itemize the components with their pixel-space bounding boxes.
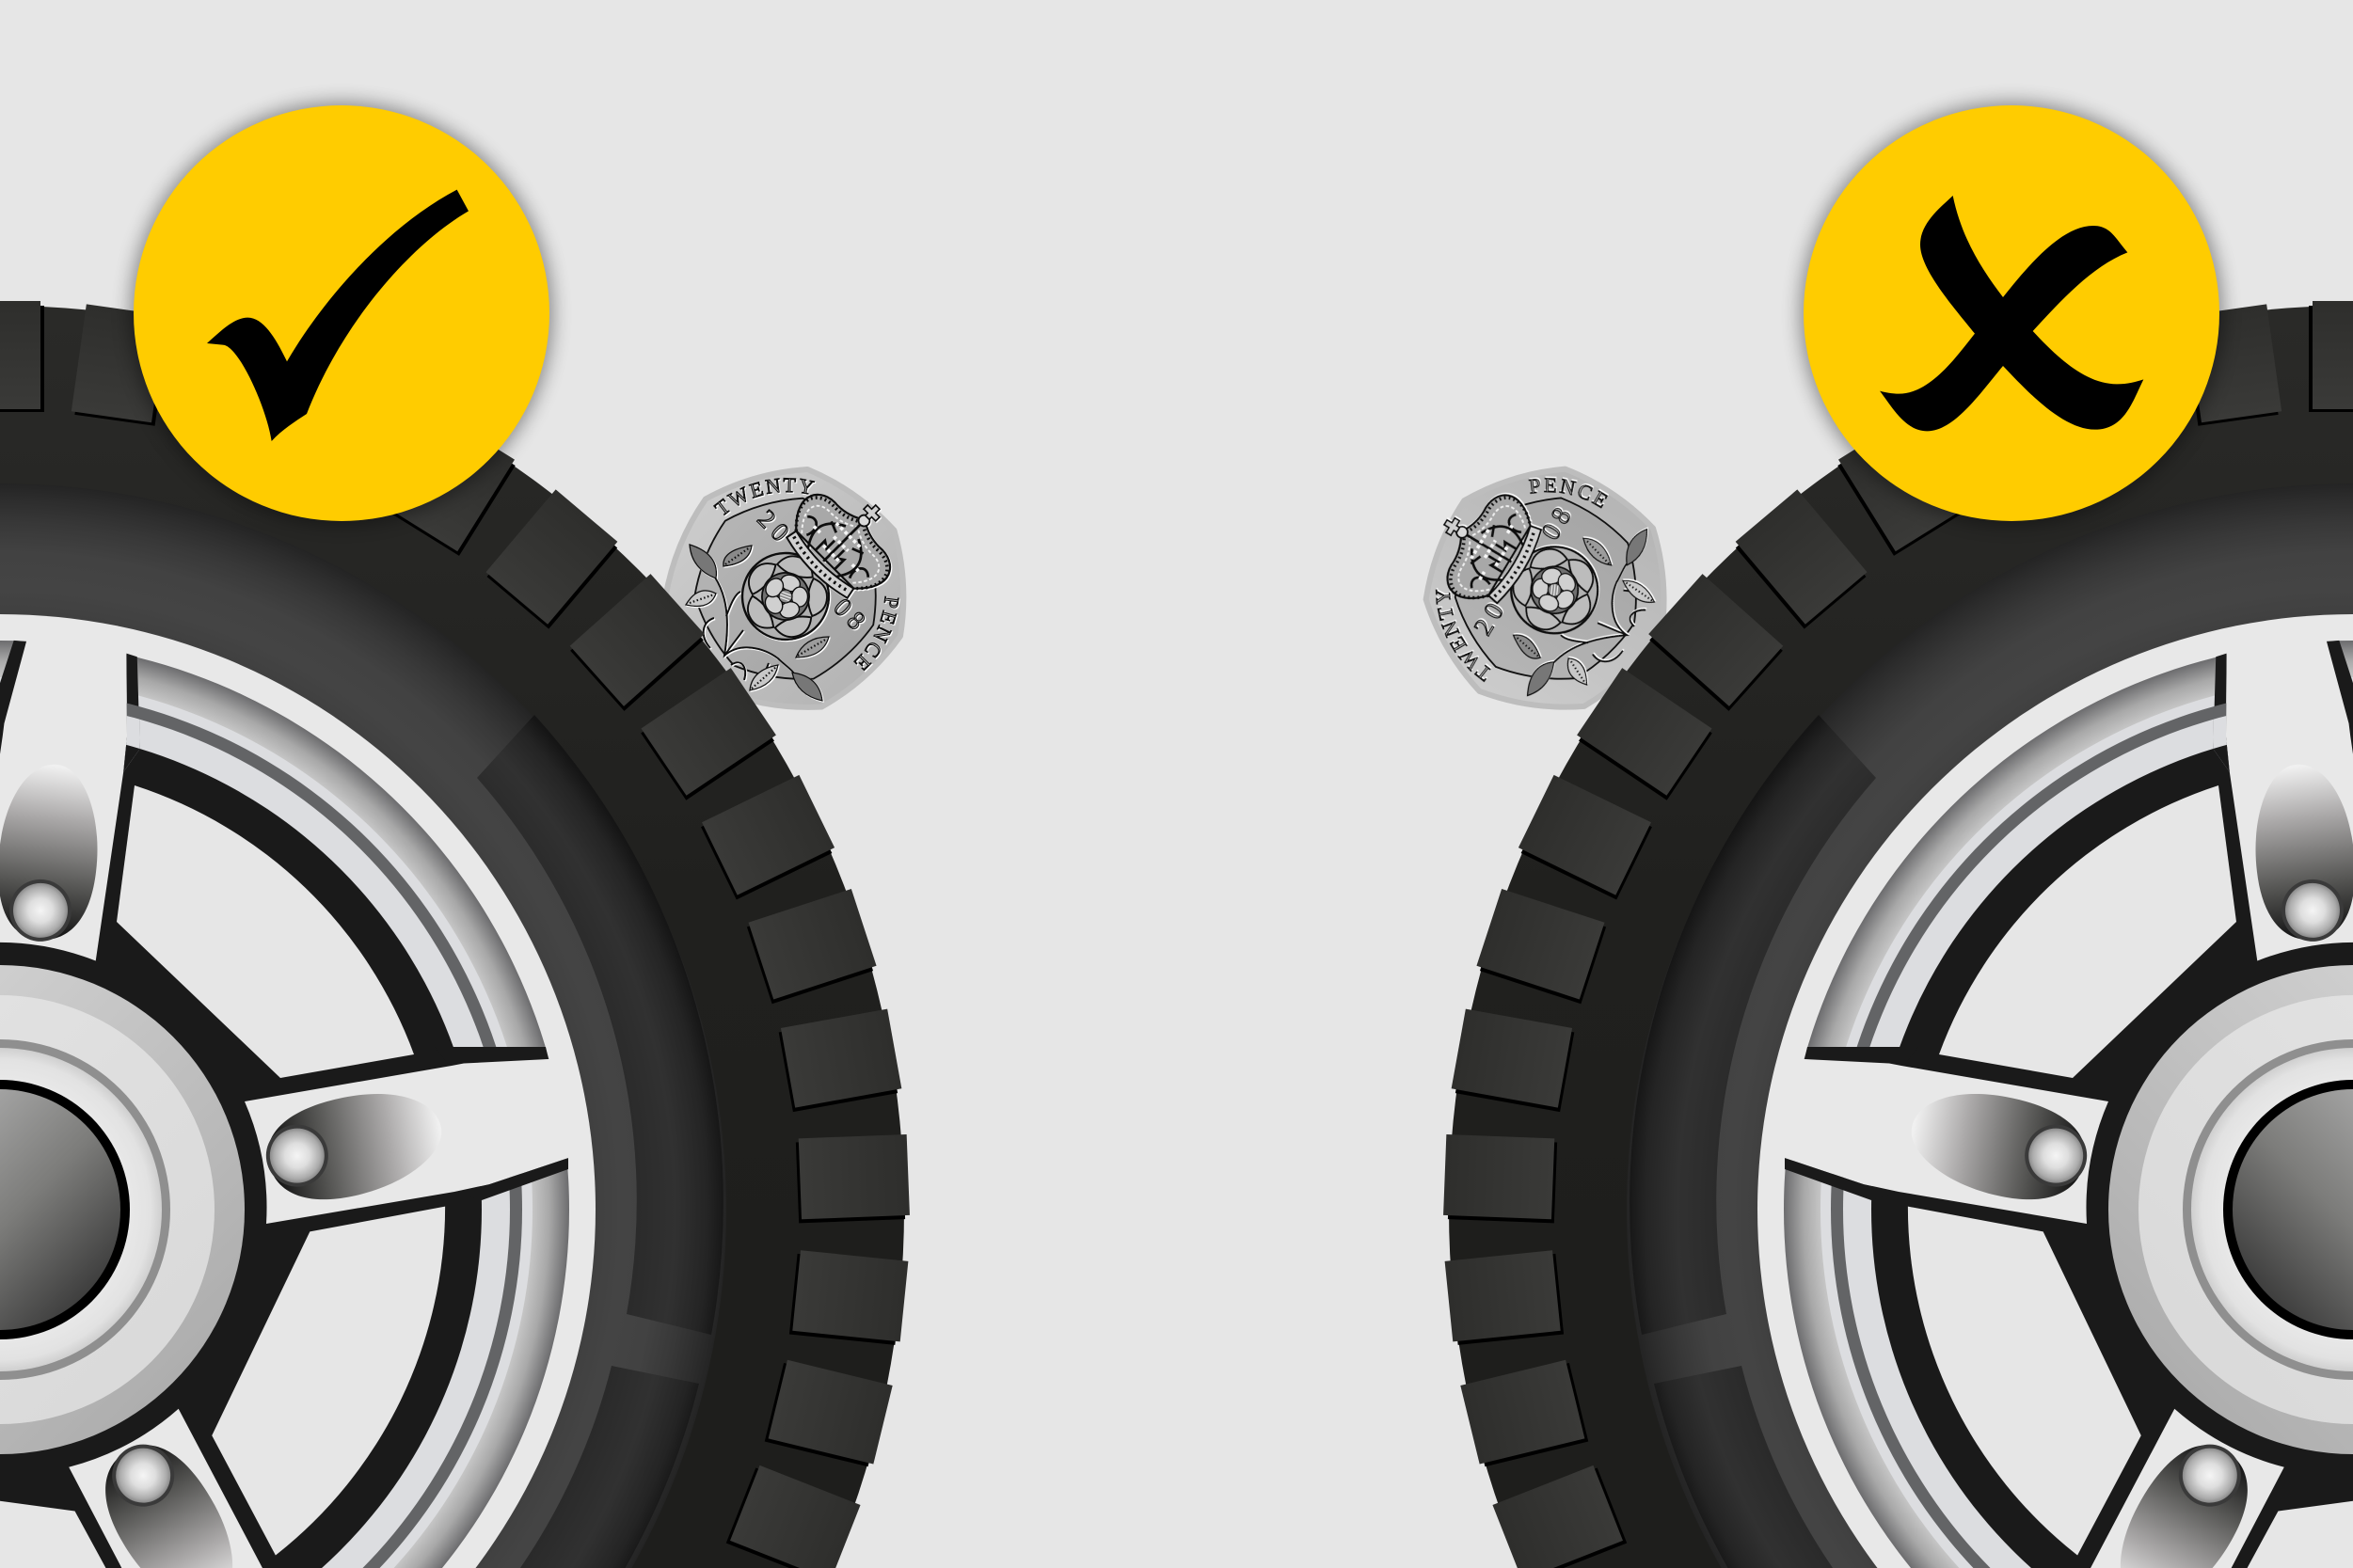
coin: 20p left, legal tread: 08 bbox=[828, 593, 875, 640]
alloy rim rings bbox=[0, 614, 596, 1568]
icon: cross bbox=[1880, 196, 2143, 431]
tyre tread ring bbox=[0, 306, 904, 1568]
coin: 20p left, legal tread: 20 bbox=[752, 504, 799, 551]
coin: 20p left, legal tread: TWENTY bbox=[713, 478, 817, 517]
coin: 20p right, worn tread bbox=[1423, 467, 1667, 710]
spokes with wheel bolts bbox=[0, 611, 576, 1568]
tyre sidewall bbox=[0, 483, 726, 1568]
sidewall dark sectors bbox=[315, 715, 723, 1568]
left wheel bbox=[0, 301, 910, 1568]
coin: 20p right, worn tread: 08 bbox=[1536, 498, 1581, 546]
badge: no with cross bbox=[1801, 103, 2222, 524]
top spoke rim band detail bbox=[123, 704, 2230, 771]
coin: 20p right, worn tread: TWENTY bbox=[1436, 588, 1492, 683]
badge: yes with tick bbox=[131, 103, 552, 524]
wheel hub bbox=[0, 965, 245, 1454]
coin: 20p left, legal tread: PENCE bbox=[853, 596, 900, 673]
coin: 20p right, worn tread: 20 bbox=[1469, 594, 1513, 641]
rim windows bbox=[0, 685, 532, 1568]
icon: tick bbox=[207, 190, 469, 441]
tread blocks bbox=[0, 301, 910, 1568]
coin: 20p right, worn tread: PENCE bbox=[1528, 476, 1609, 509]
right wheel bbox=[1443, 301, 2353, 1568]
coin: 20p left, legal tread bbox=[664, 467, 907, 710]
